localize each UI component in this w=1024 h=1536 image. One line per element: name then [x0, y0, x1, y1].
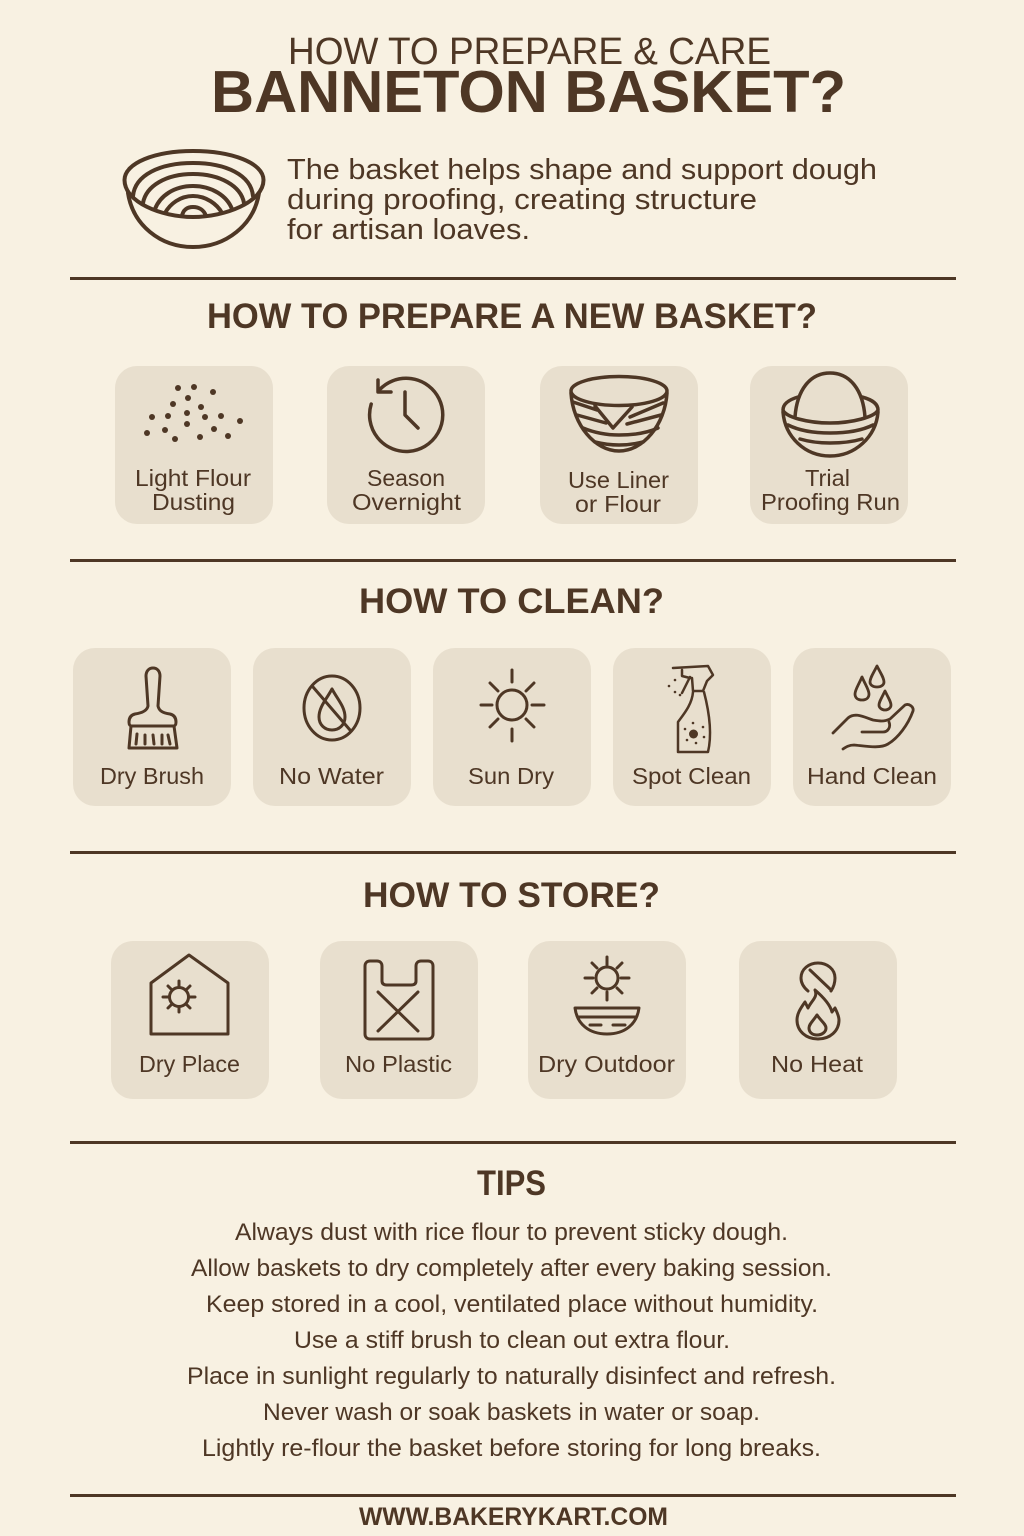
card: use liner or flour	[540, 366, 698, 524]
label: Proofing Run	[761, 489, 900, 515]
label: Use Liner	[568, 467, 669, 493]
card: dry brush	[73, 648, 231, 806]
tips list: Use a stiff brush to clean out extra flour.	[294, 1327, 730, 1354]
card: spot clean	[613, 648, 771, 806]
icon: crossed-out plastic bag	[365, 961, 433, 1039]
card: no heat	[739, 941, 897, 1099]
card: sun dry	[433, 648, 591, 806]
label: Dry Place	[139, 1051, 240, 1077]
intro text: The basket helps shape and support dough	[287, 154, 877, 186]
label: No Plastic	[345, 1051, 452, 1077]
card: light flour dusting	[115, 366, 273, 524]
card: season overnight	[327, 366, 485, 524]
icon: hand and drops	[833, 666, 913, 749]
icon: basket with liner	[571, 376, 667, 451]
tips list: Never wash or soak baskets in water or soap.	[263, 1399, 760, 1426]
icon: crossed-out water drop	[304, 676, 360, 740]
intro text: during proofing, creating structure	[287, 184, 757, 216]
tips list: Keep stored in a cool, ventilated place without humidity.	[206, 1291, 818, 1318]
label: Dry Outdoor	[538, 1051, 675, 1077]
card: dry place	[111, 941, 269, 1099]
label: Dry Brush	[100, 763, 204, 789]
label: No Heat	[771, 1051, 863, 1077]
tips list: Place in sunlight regularly to naturally disinfect and refresh.	[187, 1363, 836, 1390]
title: HOW TO PREPARE & CARE	[288, 31, 771, 73]
heading: how to clean: HOW TO CLEAN?	[359, 582, 664, 621]
icon: dough in basket	[783, 373, 878, 456]
label: or Flour	[575, 491, 661, 517]
title	[211, 31, 846, 125]
label: Overnight	[352, 489, 461, 515]
icon: sun	[481, 670, 544, 741]
tips list: Lightly re-flour the basket before storing for long breaks.	[202, 1435, 821, 1462]
tips list: Always dust with rice flour to prevent sticky dough.	[235, 1219, 788, 1246]
label: Dusting	[152, 489, 235, 515]
intro text: for artisan loaves.	[287, 214, 530, 246]
icon: basket under sun	[575, 957, 639, 1034]
label: Season	[367, 465, 445, 491]
card: dry outdoor	[528, 941, 686, 1099]
intro text	[287, 154, 877, 246]
tips list: Allow baskets to dry completely after every baking session.	[191, 1255, 832, 1282]
card: no plastic	[320, 941, 478, 1099]
label: No Water	[279, 763, 384, 789]
icon: brush	[129, 668, 177, 748]
tips list	[187, 1219, 836, 1462]
icon: flour dots	[144, 384, 243, 442]
heading: how to store: HOW TO STORE?	[363, 876, 660, 915]
icon: clock with return arrow	[370, 378, 443, 451]
heading: tips: TIPS	[477, 1164, 546, 1203]
heading: how to prepare: HOW TO PREPARE A NEW BASKET?	[207, 297, 817, 336]
label: Trial	[805, 465, 850, 491]
title: BANNETON BASKET?	[211, 59, 846, 125]
icon: banneton basket	[124, 151, 264, 247]
card: no water	[253, 648, 411, 806]
card: trial proofing run	[750, 366, 908, 524]
icon: house with sun	[151, 955, 228, 1034]
label: Spot Clean	[632, 763, 751, 789]
footer website: WWW.BAKERYKART.COM	[359, 1503, 668, 1531]
label: Light Flour	[135, 465, 251, 491]
card: hand clean	[793, 648, 951, 806]
label: Sun Dry	[468, 763, 554, 789]
icon: spray bottle	[668, 666, 713, 752]
icon: crossed-out flame	[797, 963, 839, 1039]
label: Hand Clean	[807, 763, 937, 789]
